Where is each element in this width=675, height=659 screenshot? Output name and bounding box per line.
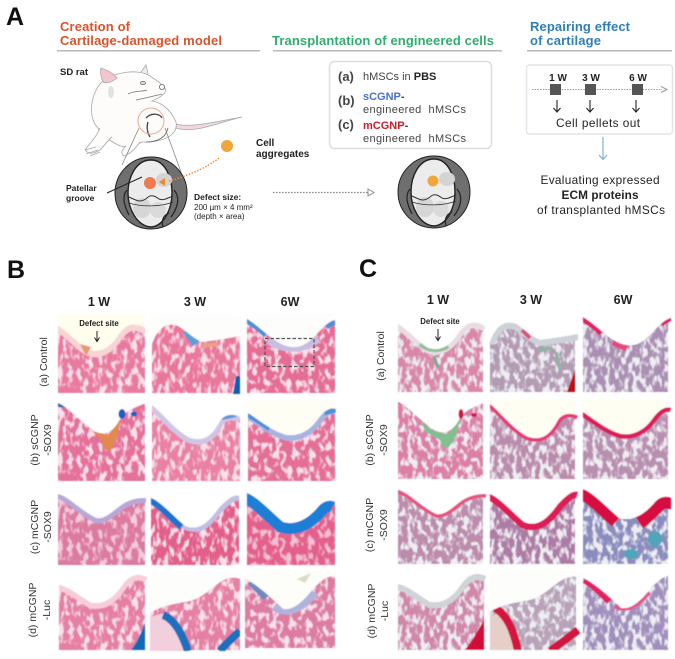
defect size note <box>194 192 253 221</box>
micrograph C a 1W <box>398 312 485 392</box>
panel: cell groups box: engineered hMSCs <box>363 104 466 116</box>
defect size note: Defect size: <box>194 192 241 202</box>
micrograph C d 6W <box>583 570 668 651</box>
panel B column headings <box>88 295 300 309</box>
panel: timeline box: 6 W <box>629 73 647 84</box>
heading: transplantation of engineered cells: Transplantation of engineered cells <box>272 33 494 48</box>
micrograph B b 3W <box>152 401 240 481</box>
defect site annotation panel B <box>79 319 119 342</box>
heading: creation of cartilage-damaged model <box>57 19 260 52</box>
micrograph B a 6W with dashed region <box>247 314 335 393</box>
micrograph B c 3W <box>151 488 239 565</box>
heading: creation of cartilage-damaged model: Creation of <box>60 19 131 34</box>
micrograph C a 3W <box>490 312 578 392</box>
panel: cell groups box: engineered hMSCs <box>363 133 466 145</box>
panel C row labels: (d) mCGNP <box>366 584 378 638</box>
arrow: timeline to evaluation <box>599 137 607 160</box>
micrograph B b 6W <box>248 401 336 481</box>
illustration: SD rat <box>85 65 242 156</box>
icon: cell aggregate with dotted path <box>169 140 233 181</box>
patellar groove label: Patellar <box>66 183 97 193</box>
micrograph C a 6W <box>583 312 671 392</box>
panel C row labels: -SOX9 <box>378 509 390 541</box>
patellar groove label <box>66 183 97 203</box>
panel B row labels: (c) mCGNP <box>29 500 41 554</box>
panel B row labels: -Luc <box>41 600 53 620</box>
micrograph C c 3W <box>490 484 578 565</box>
heading: creation of cartilage-damaged model: Cartilage-damaged model <box>60 33 222 48</box>
illustration: knee defect <box>107 157 187 229</box>
callout lines from knee to zoom <box>122 108 181 172</box>
defect size note: 200 µm × 4 mm² <box>194 203 253 212</box>
micrograph C b 6W <box>583 400 671 479</box>
defect site annotation panel C <box>420 317 460 340</box>
panel: cell groups box: (b) <box>338 93 355 108</box>
panel C row labels <box>364 331 391 638</box>
panel: cell groups box: sCGNP- <box>363 91 405 103</box>
heading: repairing effect of cartilage <box>527 19 672 52</box>
defect site annotation panel B: Defect site <box>79 319 119 328</box>
defect size note: (depth × area) <box>194 212 245 221</box>
panel: cell groups box: mCGNP- <box>363 120 409 132</box>
panel: cell groups box: (a) <box>338 69 354 84</box>
panel: cell groups box: (c) <box>338 117 354 132</box>
panel C row labels: -Luc <box>379 601 391 621</box>
panel B column headings: 1 W <box>88 295 110 309</box>
patellar groove label: groove <box>66 193 95 203</box>
panel B row labels: -SOX9 <box>42 511 54 543</box>
SD rat label: SD rat <box>60 67 89 78</box>
micrograph C c 6W <box>583 484 671 565</box>
micrograph C b 3W <box>490 400 578 479</box>
text: evaluating ECM proteins: Evaluating expressed <box>540 173 660 187</box>
panel B row labels: (d) mCGNP <box>27 583 39 637</box>
micrograph B d 1W <box>59 571 147 650</box>
micrograph C c 1W <box>398 484 486 565</box>
text: evaluating ECM proteins: ECM proteins <box>562 188 639 202</box>
defect site annotation panel C: Defect site <box>420 317 460 326</box>
panel B row labels: (a) Control <box>38 337 50 387</box>
cell aggregates label: Cell <box>256 138 275 149</box>
micrograph B a 3W <box>152 314 240 394</box>
panel C row labels: (c) mCGNP <box>364 498 376 552</box>
arrow: dotted transplant arrow <box>273 189 374 196</box>
text: evaluating ECM proteins <box>537 173 665 217</box>
panel: cell groups box <box>330 62 492 148</box>
micrograph B d 3W <box>150 571 240 651</box>
panel B column headings: 6W <box>281 295 300 309</box>
micrograph C d 3W <box>490 570 578 651</box>
text: evaluating ECM proteins: of transplanted hMSCs <box>537 203 665 217</box>
panel A label: A <box>6 3 24 31</box>
panel B row labels: -SOX9 <box>42 424 54 456</box>
panel B label: B <box>7 256 25 284</box>
illustration: knee with transplanted cells <box>398 156 470 228</box>
panel C row labels: (b) sCGNP <box>364 414 376 466</box>
cell aggregates label: aggregates <box>256 149 310 160</box>
panel C row labels: -SOX9 <box>378 424 390 456</box>
heading: repairing effect of cartilage: Repairing effect <box>530 19 631 34</box>
micrograph C b 1W <box>398 400 483 479</box>
panel C column headings: 3 W <box>520 293 542 307</box>
panel: timeline box <box>526 65 672 134</box>
micrograph C d 1W <box>398 570 486 651</box>
panel C column headings <box>427 293 633 307</box>
panel: timeline box: Cell pellets out <box>556 116 641 130</box>
panel: timeline box: 3 W <box>582 73 600 84</box>
micrograph B d 6W <box>245 571 335 648</box>
panel: timeline box: 1 W <box>549 73 567 84</box>
panel: cell groups box: hMSCs in PBS <box>363 71 436 83</box>
micrograph B c 1W <box>58 488 146 565</box>
panel B column headings: 3 W <box>184 295 206 309</box>
panel B row labels <box>27 337 54 637</box>
panel C row labels: (a) Control <box>375 331 387 381</box>
micrograph B a 1W <box>58 314 145 393</box>
cell aggregates label <box>256 138 310 160</box>
panel C column headings: 6W <box>614 293 633 307</box>
micrograph B c 6W <box>247 488 335 565</box>
heading: repairing effect of cartilage: of cartilage <box>530 33 601 48</box>
micrograph B b 1W <box>58 401 145 481</box>
panel B row labels: (b) sCGNP <box>29 414 41 466</box>
panel C column headings: 1 W <box>427 293 449 307</box>
panel C label: C <box>359 255 377 283</box>
